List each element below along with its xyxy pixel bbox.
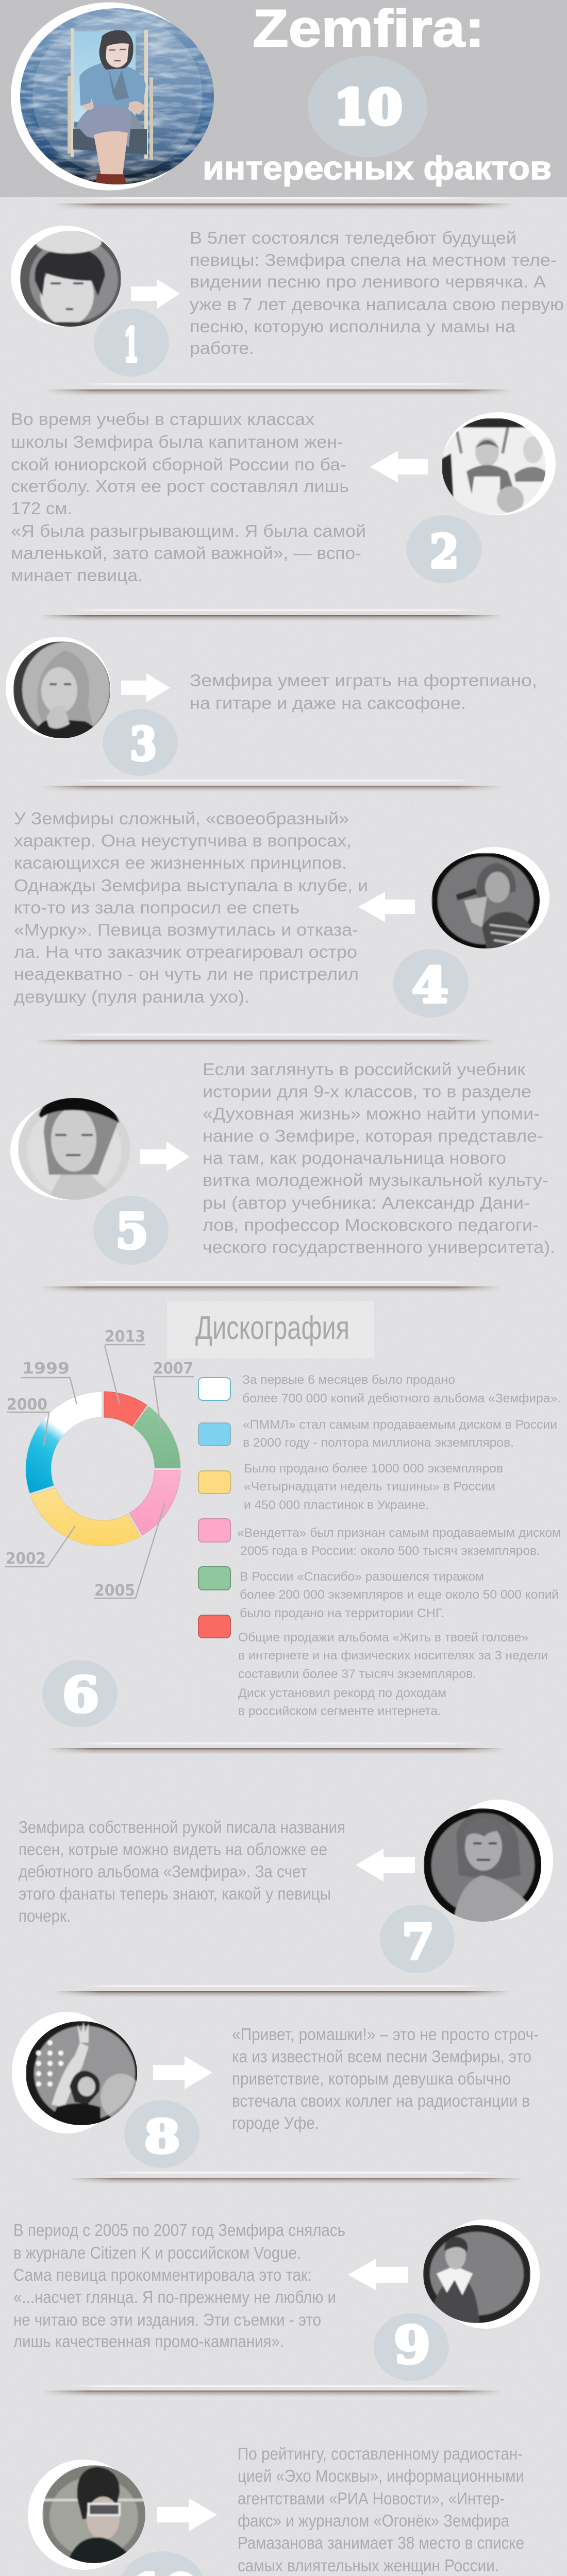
text: в журнале Citizen K и российском Vogue. bbox=[13, 2243, 301, 2262]
legend: 2005 года в России: около 500 тысяч экземпляров. bbox=[240, 1544, 540, 1558]
text: почерк. bbox=[19, 1906, 71, 1925]
legend: Диск установил рекорд по доходам bbox=[238, 1686, 446, 1700]
text: маленькой, зато самой важной», — вспо- bbox=[11, 544, 361, 563]
legend: Общие продажи альбома «Жить в твоей голове» bbox=[238, 1631, 528, 1645]
text: ры (автор учебника: Александр Дани- bbox=[203, 1193, 530, 1212]
badge: 6 bbox=[42, 1660, 118, 1727]
photo: child portrait bbox=[11, 226, 121, 330]
text: ка из известной всем песни Земфиры, это bbox=[232, 2047, 531, 2066]
badge: 7: 7 bbox=[402, 1914, 434, 1971]
text: уже в 7 лет девочка написала свою первую bbox=[190, 295, 564, 314]
arrow bbox=[153, 2056, 212, 2089]
arrow bbox=[157, 2498, 217, 2531]
badge: 2 bbox=[406, 515, 481, 583]
chart labels: years and leader lines: 2013 bbox=[105, 1328, 145, 1346]
text: Во время учебы в старших классах bbox=[11, 410, 315, 429]
text bbox=[11, 410, 366, 585]
text: неадекватно - он чуть ли не пристрелил bbox=[14, 964, 359, 984]
panel: fact 5 bbox=[10, 1060, 555, 1265]
text: «Духовная жизнь» можно найти упоми- bbox=[203, 1104, 540, 1123]
badge: 2: 2 bbox=[430, 524, 459, 578]
text bbox=[190, 228, 564, 358]
photo: portrait with hand at lips bbox=[6, 637, 111, 739]
text: Земфира собственной рукой писала названия bbox=[19, 1818, 345, 1837]
text: лишь качественная промо-кампания». bbox=[13, 2332, 284, 2351]
badge: 5: 5 bbox=[115, 1203, 148, 1260]
badge: 4: 4 bbox=[412, 957, 448, 1014]
panel: fact 7 bbox=[19, 1800, 553, 1973]
text: Земфира умеет играть на фортепиано, bbox=[190, 671, 537, 690]
badge: 9 bbox=[374, 2313, 449, 2381]
legend: в интернете и на физических носителях за 3 недели bbox=[238, 1649, 548, 1663]
photo: on stage with raised hand bbox=[12, 2012, 142, 2133]
legend: За первые 6 месяцев было продано bbox=[242, 1373, 455, 1387]
photo: woman in dark dress with white collar bbox=[423, 2219, 540, 2329]
text: кто-то из зала попросил ее спеть bbox=[14, 898, 299, 917]
text bbox=[232, 2025, 539, 2132]
badge: 10 bbox=[308, 56, 427, 157]
text: ла. На что заказчик отреагировал остро bbox=[14, 942, 357, 961]
text: песню, которую исполнила у мамы на bbox=[190, 317, 516, 336]
legend: и 450 000 пластинок в Украине. bbox=[244, 1498, 429, 1512]
photo: Zemfira in a deck chair on the water bbox=[11, 2, 214, 191]
badge: 5 bbox=[93, 1196, 169, 1265]
text: дебютного альбома «Земфира». За счет bbox=[19, 1862, 307, 1881]
legend: «Четырнадцати недель тишины» в России bbox=[244, 1480, 495, 1494]
text bbox=[238, 2444, 524, 2575]
photo: close-up portrait bbox=[10, 1097, 130, 1200]
chart labels: years and leader lines: 2002 bbox=[6, 1550, 46, 1568]
text: на гитаре и даже на саксофоне. bbox=[190, 693, 466, 713]
text bbox=[13, 2221, 345, 2351]
arrow bbox=[356, 1849, 415, 1882]
text: Сама певица прокомментировала это так: bbox=[13, 2265, 312, 2284]
legend: было продано на территории СНГ. bbox=[240, 1606, 444, 1620]
badge: 10: 10 bbox=[334, 79, 402, 135]
text: видении песню про ленивого червячка. А bbox=[190, 272, 546, 291]
text: «...насчет глянца. Я по-прежнему не люблю и bbox=[13, 2287, 336, 2307]
panel: fact 8 bbox=[12, 2012, 539, 2168]
legend: «Вендетта» был признан самым продаваемым диском bbox=[237, 1526, 561, 1540]
text: песен, котрые можно видеть на обложке ее bbox=[19, 1840, 327, 1859]
text bbox=[203, 1060, 555, 1257]
photo: portrait with fringe bbox=[424, 1800, 553, 1924]
text: По рейтингу, составленному радиостан- bbox=[238, 2444, 523, 2463]
badge: 7 bbox=[380, 1905, 455, 1973]
legend bbox=[198, 1373, 561, 1718]
text: агентствами «РИА Новости», «Интер- bbox=[238, 2489, 505, 2508]
text bbox=[14, 809, 368, 1006]
legend: в 2000 году - полтора миллиона экземпляров. bbox=[243, 1436, 514, 1450]
text bbox=[190, 671, 537, 713]
text: витка молодежной музыкальной культу- bbox=[203, 1171, 548, 1190]
heading: discography bbox=[167, 1301, 374, 1358]
text: скетболу. Хотя ее рост составлял лишь bbox=[11, 477, 349, 496]
donut chart bbox=[26, 1392, 180, 1546]
badge: 1: 1 bbox=[124, 318, 139, 372]
text: Однажды Земфира выступала в клубе, и bbox=[14, 876, 368, 895]
chart labels: years and leader lines: 2007 bbox=[153, 1360, 193, 1378]
chart labels: years and leader lines: 2005 bbox=[94, 1582, 135, 1600]
arrow bbox=[370, 451, 428, 483]
text: ческого государственного университета). bbox=[203, 1238, 555, 1257]
panel: fact 4 bbox=[14, 809, 549, 1018]
heading: discography: Дискография bbox=[195, 1309, 349, 1346]
text: певицы: Земфира спела на местном теле- bbox=[190, 250, 557, 269]
text: этого фанаты теперь знают, какой у певицы bbox=[19, 1884, 331, 1903]
text: Рамазанова занимает 38 место в списке bbox=[238, 2533, 524, 2552]
legend: В России «Спасибо» разошелся тиражом bbox=[240, 1570, 484, 1584]
text: приветствие, которым девушка обычно bbox=[232, 2069, 511, 2088]
badge: 3: 3 bbox=[130, 717, 157, 771]
legend: в российском сегменте интернета. bbox=[238, 1704, 441, 1718]
badge: 9: 9 bbox=[394, 2316, 430, 2375]
badge: 6: 6 bbox=[62, 1667, 99, 1723]
badge: 4 bbox=[393, 949, 469, 1018]
panel: fact 3 bbox=[6, 637, 537, 776]
text: В 5лет состоялся теледебют будущей bbox=[190, 228, 516, 247]
text: касающихся ее жизненных принципов. bbox=[14, 853, 347, 872]
text: У Земфиры сложный, «своеобразный» bbox=[14, 809, 349, 828]
text bbox=[19, 1818, 345, 1925]
chart labels: years and leader lines bbox=[5, 1328, 194, 1600]
text: минает певица. bbox=[11, 566, 143, 585]
panel: fact 9 bbox=[13, 2219, 540, 2381]
text: не читаю все эти издания. Эти съемки - это bbox=[13, 2310, 321, 2329]
chart labels: years and leader lines: 1999 bbox=[22, 1360, 70, 1378]
panel: fact 1 bbox=[11, 226, 564, 377]
text: лов, профессор Московского педагоги- bbox=[203, 1215, 539, 1234]
photo: singing with microphone bbox=[432, 847, 549, 951]
badge: 8 bbox=[124, 2100, 199, 2168]
text: «Я была разыгрывающим. Я была самой bbox=[11, 521, 366, 540]
text: девушку (пуля ранила ухо). bbox=[14, 987, 249, 1006]
legend: составили более 37 тысяч экземпляров. bbox=[238, 1667, 476, 1681]
text: школы Земфира была капитаном жен- bbox=[11, 432, 343, 451]
arrow bbox=[121, 673, 170, 702]
text: нание о Земфире, которая представле- bbox=[203, 1126, 543, 1145]
subtitle: интересных фактов bbox=[203, 149, 552, 187]
chart labels: years and leader lines: 2000 bbox=[7, 1396, 47, 1414]
badge: 10 bbox=[118, 2551, 206, 2576]
badge: 8: 8 bbox=[144, 2110, 180, 2163]
text: В период с 2005 по 2007 год Земфира снялась bbox=[13, 2221, 345, 2240]
text: цией «Эхо Москвы», информационными bbox=[238, 2466, 524, 2485]
arrow bbox=[358, 892, 415, 922]
text: «Мурку». Певица возмутилась и отказа- bbox=[14, 920, 358, 939]
text: работе. bbox=[190, 338, 254, 358]
legend: более 200 000 экземпляров и еще около 50 000 копий bbox=[240, 1588, 559, 1602]
arrow bbox=[131, 279, 180, 309]
panel: fact 2 bbox=[11, 410, 556, 585]
text: Если заглянуть в российский учебник bbox=[203, 1060, 526, 1079]
legend: «ПММЛ» стал самым продаваемым диском в России bbox=[243, 1418, 557, 1432]
text: самых влиятельных женщин России. bbox=[238, 2556, 499, 2575]
badge: 1 bbox=[94, 309, 169, 377]
text: истории для 9-х классов, то в разделе bbox=[203, 1082, 531, 1101]
text: на там, как родоначальница нового bbox=[203, 1148, 506, 1167]
text: городе Уфе. bbox=[232, 2113, 319, 2132]
photo: portrait with white sunglasses bbox=[28, 2460, 146, 2570]
panel: fact 10 bbox=[28, 2444, 524, 2576]
panel: fact 6 discography bbox=[5, 1301, 561, 1727]
text: встечала своих коллег на радиостанции в bbox=[232, 2091, 530, 2110]
text: факс» и журналом «Огонёк» Земфира bbox=[238, 2511, 510, 2530]
text: характер. Она неуступчива в вопросах, bbox=[14, 831, 352, 850]
photo: school basketball team bbox=[442, 412, 556, 515]
text: «Привет, ромашки!» – это не просто строч- bbox=[232, 2025, 539, 2044]
arrow bbox=[348, 2259, 408, 2291]
text: ской юниорской сборной России по ба- bbox=[11, 455, 346, 474]
badge: 3 bbox=[103, 709, 178, 776]
arrow bbox=[140, 1142, 190, 1172]
legend: Было продано более 1000 000 экземпляров bbox=[244, 1462, 503, 1476]
title: Zemfira: Zemfira: bbox=[253, 0, 485, 58]
panel: header bbox=[11, 0, 552, 191]
text: 172 см. bbox=[11, 499, 72, 518]
legend: более 700 000 копий дебютного альбома «Земфира». bbox=[242, 1392, 561, 1405]
